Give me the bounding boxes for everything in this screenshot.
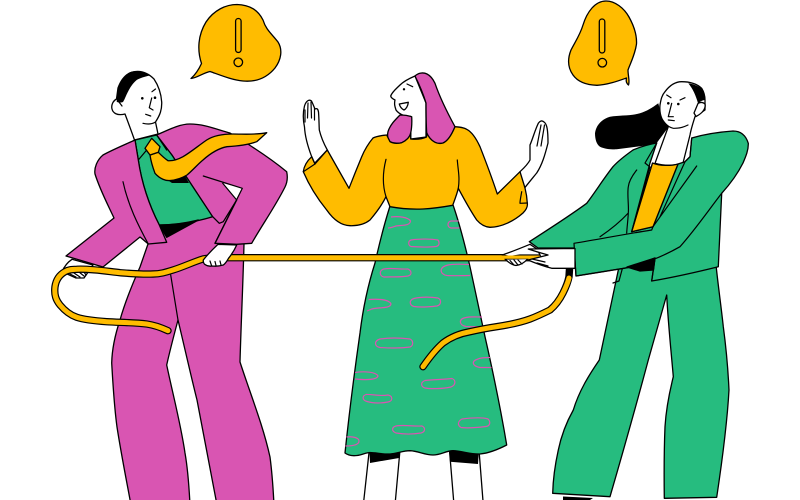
green shirt <box>135 135 213 225</box>
figure: man in pink suit <box>62 71 287 500</box>
icon: exclamation mark <box>598 19 607 67</box>
hand right <box>520 121 548 192</box>
belly shadow <box>159 220 198 237</box>
trousers <box>112 205 274 500</box>
neck and head <box>112 71 162 140</box>
black underlayer <box>627 258 655 271</box>
hair <box>415 73 455 143</box>
collar seams <box>135 135 167 160</box>
figure: woman in green suit <box>529 82 748 500</box>
skirt <box>345 204 507 456</box>
face details <box>662 95 688 128</box>
speech bubble: left alert <box>191 4 281 81</box>
hair <box>117 71 150 103</box>
hand left <box>62 259 93 278</box>
neck and face <box>391 76 426 139</box>
speech bubble: right alert <box>569 1 637 85</box>
gap under arm <box>223 183 242 200</box>
rope: long strand <box>55 258 538 331</box>
face details <box>119 89 156 124</box>
yellow top <box>303 127 527 227</box>
skirt pattern <box>346 217 492 446</box>
shoes <box>563 496 593 500</box>
jacket body <box>529 131 748 281</box>
hand on rope: man <box>203 244 237 266</box>
hands on rope: right woman <box>500 244 575 268</box>
jacket seams <box>574 138 722 281</box>
icon: exclamation mark <box>234 18 243 67</box>
yellow top visible <box>632 163 678 232</box>
hair top <box>688 83 705 103</box>
long hair <box>595 103 670 149</box>
rope: right strand <box>423 269 570 367</box>
legs <box>363 450 400 500</box>
face details <box>399 84 413 110</box>
hand left <box>303 100 327 164</box>
figure: woman in centre <box>303 73 548 500</box>
orange tie <box>145 133 267 183</box>
jacket right <box>157 124 287 244</box>
jacket left <box>66 140 167 267</box>
neck and head <box>655 82 705 165</box>
trousers <box>553 262 729 498</box>
